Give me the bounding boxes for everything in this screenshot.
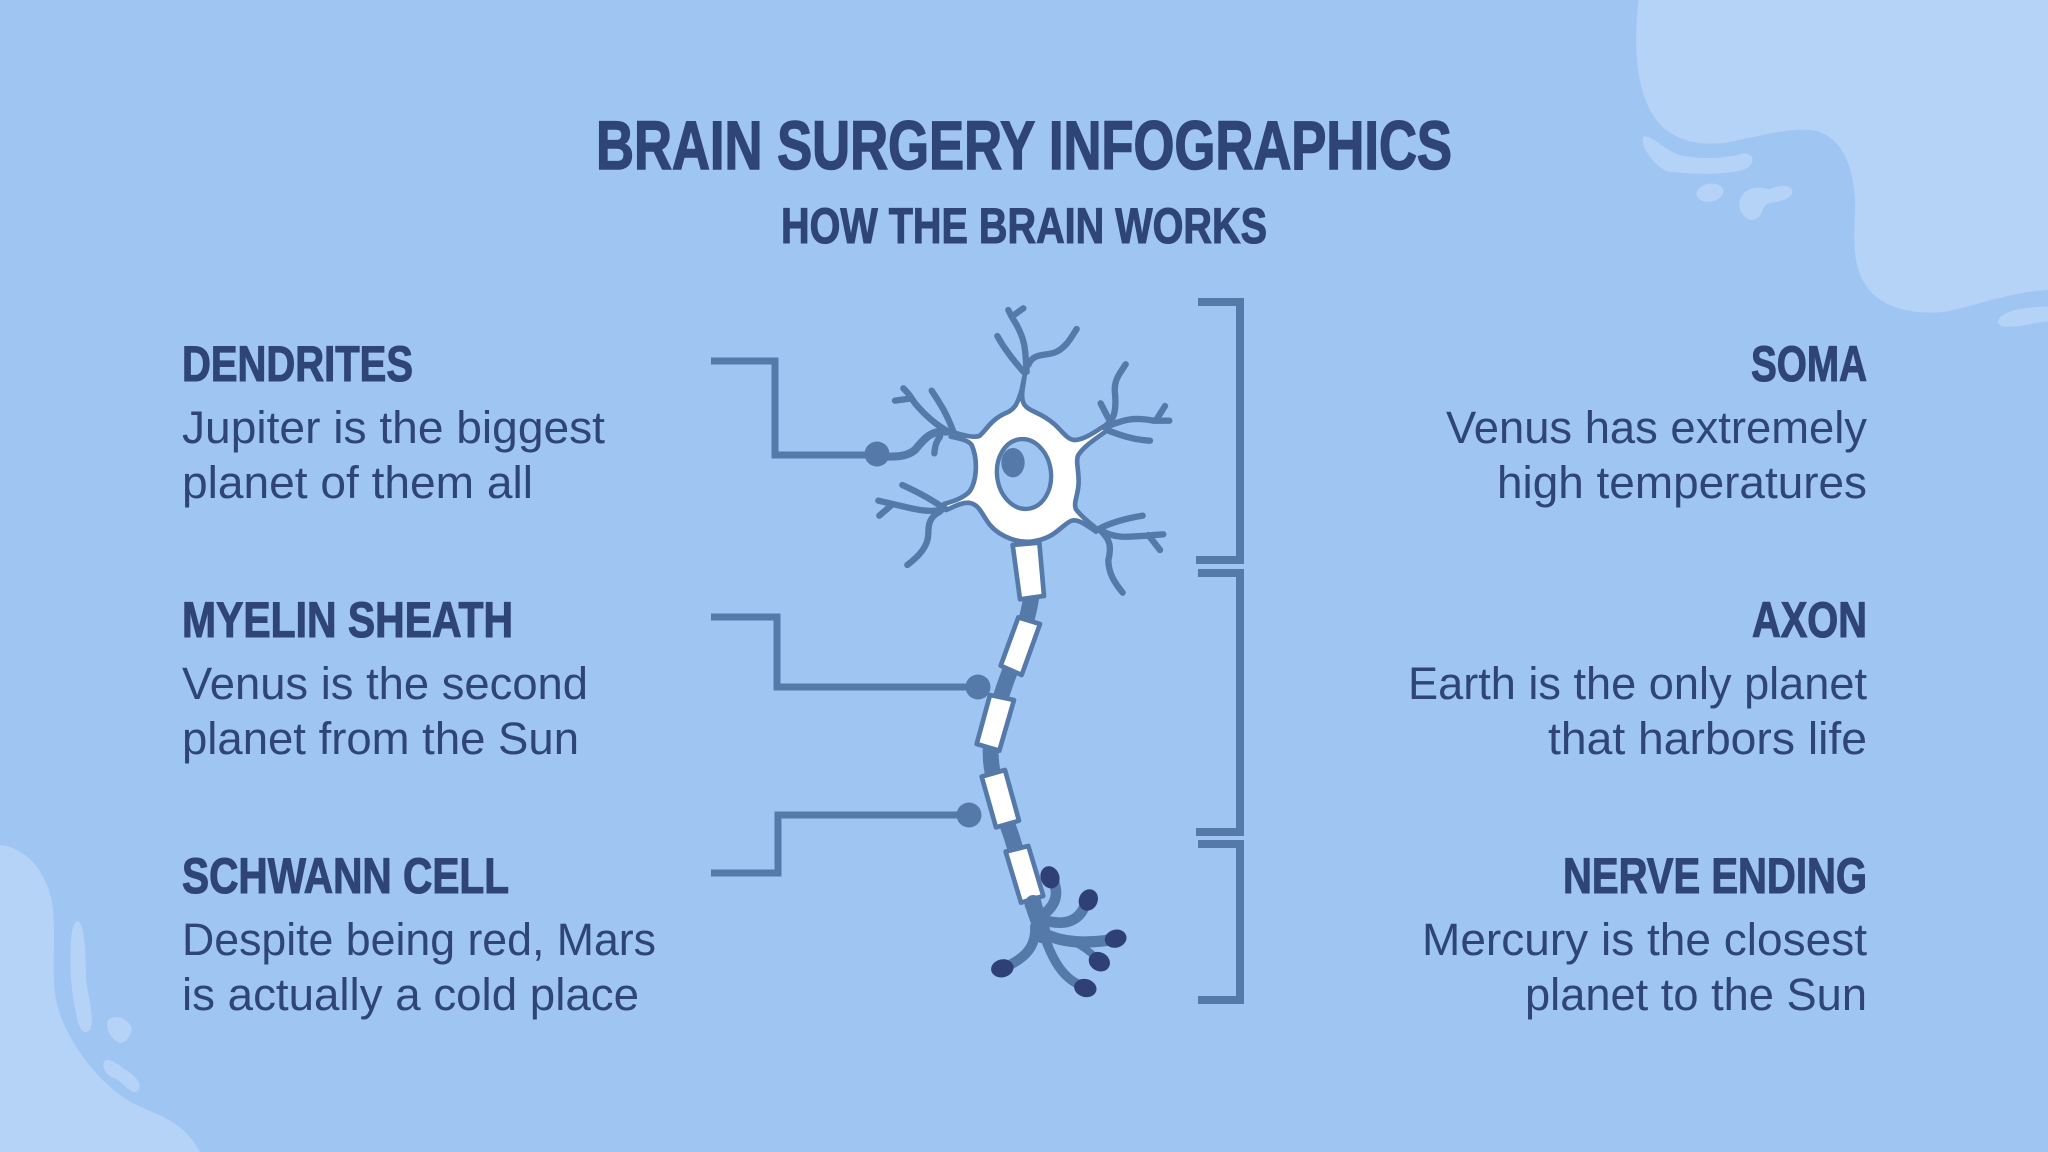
text: nerve ending description: planet to the Sun — [1525, 969, 1867, 1020]
panel: schwann cell — [182, 848, 656, 1020]
nucleus — [993, 436, 1055, 512]
bracket: soma — [1196, 298, 1244, 564]
connector: dendrites — [711, 361, 890, 466]
neuron diagram — [878, 308, 1169, 1000]
axon and myelin segments — [977, 593, 1043, 907]
cell body with dendrites — [878, 308, 1169, 599]
decoration: bottom left blob — [0, 845, 200, 1152]
panel: myelin sheath — [182, 592, 588, 764]
heading: axon: AXON — [1752, 592, 1867, 648]
title: BRAIN SURGERY INFOGRAPHICS — [596, 107, 1452, 184]
panel: soma — [1446, 336, 1867, 508]
heading: dendrites: DENDRITES — [182, 336, 413, 392]
nerve ending terminals — [989, 863, 1129, 1000]
text: soma description: high temperatures — [1497, 457, 1867, 508]
bracket: nerve ending — [1198, 840, 1244, 1004]
text: soma description: Venus has extremely — [1446, 402, 1867, 453]
subtitle: HOW THE BRAIN WORKS — [781, 198, 1267, 254]
text: nerve ending description: Mercury is the closest — [1422, 914, 1868, 965]
heading: myelin sheath: MYELIN SHEATH — [182, 592, 513, 648]
bracket: axon — [1196, 569, 1244, 836]
text: myelin sheath description: Venus is the second — [182, 658, 588, 709]
panel: axon — [1408, 592, 1867, 764]
nucleolus — [1001, 448, 1025, 477]
connector: myelin sheath — [711, 617, 990, 700]
text: axon description: Earth is the only planet — [1408, 658, 1867, 709]
panel: dendrites — [182, 336, 606, 508]
text: axon description: that harbors life — [1548, 713, 1867, 764]
heading: nerve ending: NERVE ENDING — [1563, 848, 1867, 904]
text: dendrites description: Jupiter is the biggest — [182, 402, 606, 453]
panel: nerve ending — [1422, 848, 1868, 1020]
connector: schwann cell — [711, 802, 982, 873]
text: schwann cell description: Despite being red, Mars — [182, 914, 656, 965]
first myelin segment — [1013, 543, 1044, 599]
text: dendrites description: planet of them all — [182, 457, 533, 508]
text: schwann cell description: is actually a cold place — [182, 969, 639, 1020]
text: myelin sheath description: planet from the Sun — [182, 713, 579, 764]
decoration: top right blob — [1636, 0, 2048, 327]
heading: soma: SOMA — [1751, 336, 1867, 392]
heading: schwann cell: SCHWANN CELL — [182, 848, 509, 904]
